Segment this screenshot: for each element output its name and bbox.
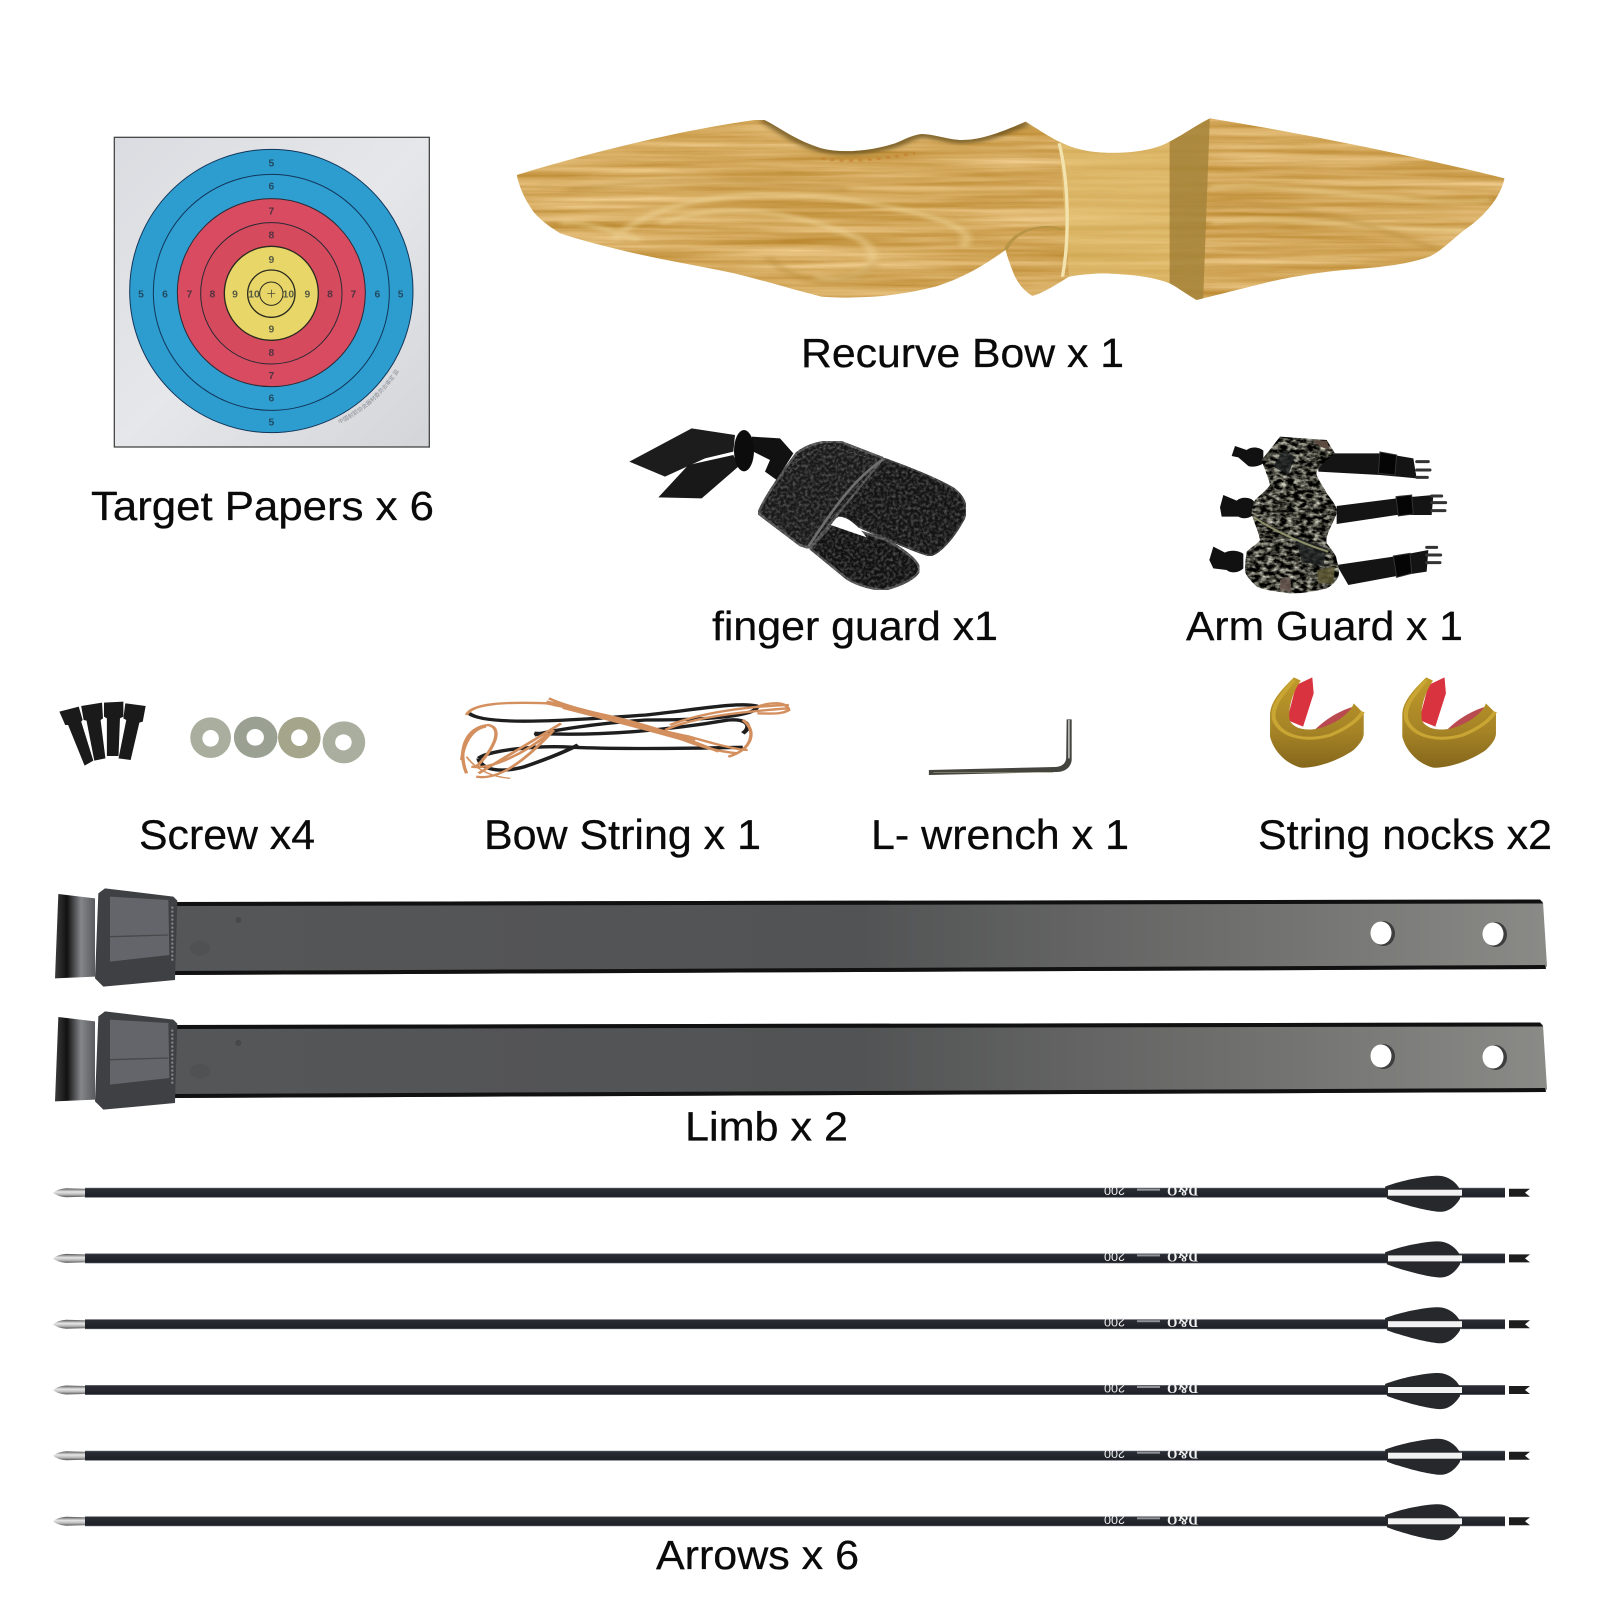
limb holes — [1372, 1044, 1395, 1069]
panel: string nocks — [1270, 677, 1496, 768]
ring numbers: 5 — [268, 159, 274, 170]
ring numbers — [138, 159, 404, 428]
camo pad — [1245, 437, 1339, 593]
panel: recurve bow riser — [516, 118, 1504, 300]
ring numbers: 6 — [374, 289, 380, 300]
ring numbers: 6 — [268, 181, 274, 192]
ring numbers: 7 — [186, 289, 192, 300]
arrow 2 — [53, 1241, 1530, 1278]
ring numbers: 6 — [162, 289, 168, 300]
copper string strands — [462, 698, 789, 778]
arrow 5 — [53, 1439, 1530, 1475]
nock 1 — [1270, 677, 1364, 768]
ring numbers: 9 — [268, 255, 274, 266]
label: target papers: Target Papers x 6 — [91, 483, 434, 529]
arrow 3: D&O — [1167, 1314, 1198, 1329]
ribbon — [629, 428, 735, 477]
ring numbers: 5 — [398, 289, 404, 300]
dark side band — [1170, 118, 1210, 300]
ring numbers: 7 — [268, 206, 274, 217]
panel: bow string — [462, 698, 789, 778]
ring numbers: 10 — [283, 289, 294, 300]
arrow 5: D&O — [1167, 1446, 1198, 1461]
right finger lobe — [837, 458, 966, 556]
arrow 6: 200 — [1104, 1512, 1125, 1526]
ring numbers: 6 — [268, 393, 274, 404]
panel: target paper — [114, 136, 430, 448]
screws — [59, 702, 146, 766]
ring numbers: 7 — [350, 289, 356, 300]
label: limb: Limb x 2 — [685, 1104, 848, 1150]
ring numbers: 9 — [232, 289, 238, 300]
ring numbers: 8 — [327, 289, 333, 300]
nock 2 — [1402, 677, 1496, 768]
label: screw: Screw x4 — [139, 811, 315, 858]
panel: L-wrench — [929, 719, 1072, 775]
arrow 3: 200 — [1104, 1315, 1125, 1329]
top edge shadow — [765, 118, 1026, 151]
ring numbers: 9 — [268, 324, 274, 335]
label: bow string: Bow String x 1 — [484, 811, 761, 858]
arrow 1 — [53, 1176, 1530, 1212]
limb hinge and head — [55, 1011, 241, 1110]
ring numbers: 7 — [268, 371, 274, 382]
arrow 4: D&O — [1167, 1380, 1198, 1395]
washers — [190, 717, 231, 758]
arrow 2: 200 — [1104, 1249, 1125, 1263]
ring numbers: 8 — [268, 231, 274, 242]
lower finger — [810, 523, 919, 590]
ring numbers: 8 — [268, 348, 274, 359]
arrow 6: D&O — [1167, 1511, 1198, 1526]
label: finger guard: finger guard x1 — [712, 603, 998, 649]
panel: limb 2 — [55, 1011, 1547, 1110]
arrow 3 — [53, 1307, 1530, 1343]
target sheet and rings — [114, 136, 430, 448]
arrow 4 — [53, 1373, 1530, 1409]
arrow 4: 200 — [1104, 1381, 1125, 1395]
arrow 1: 200 — [1104, 1184, 1125, 1198]
straps — [1318, 453, 1417, 478]
strap sliders — [1378, 452, 1413, 577]
left clips — [1232, 446, 1263, 467]
label: arrows: Arrows x 6 — [656, 1532, 859, 1578]
arrow 2: D&O — [1167, 1248, 1198, 1263]
arrow 6 — [53, 1504, 1530, 1540]
highlight seams — [1059, 143, 1067, 277]
ring numbers: 8 — [209, 289, 215, 300]
finger hole — [831, 517, 867, 537]
label: recurve bow: Recurve Bow x 1 — [801, 330, 1124, 376]
publisher note on target: 中国射箭协会器材委员会审定 监制 — [338, 369, 399, 424]
panel: finger guard — [629, 428, 966, 590]
ring numbers: 9 — [304, 289, 310, 300]
label: L-wrench: L- wrench x 1 — [871, 811, 1129, 858]
label: string nocks: String nocks x2 — [1258, 811, 1552, 858]
arrow 5: 200 — [1104, 1447, 1125, 1461]
strap buckle prongs — [1417, 462, 1430, 477]
grip section — [1059, 140, 1170, 287]
ring numbers: 5 — [268, 417, 274, 428]
panel: arm guard — [1209, 437, 1446, 593]
wood swirl grain — [560, 186, 1491, 279]
label: arm guard: Arm Guard x 1 — [1186, 603, 1463, 649]
ring numbers: 10 — [248, 289, 260, 300]
camo patches — [1273, 450, 1327, 567]
panel: limb 1 — [55, 888, 1547, 987]
ring numbers: 5 — [138, 289, 144, 300]
front pad — [758, 441, 883, 548]
limb holes — [1372, 921, 1395, 946]
panel: screws and washers — [59, 702, 365, 766]
limb hinge and head — [55, 888, 241, 987]
arrow 1: D&O — [1167, 1183, 1198, 1198]
black string loops — [469, 705, 757, 770]
